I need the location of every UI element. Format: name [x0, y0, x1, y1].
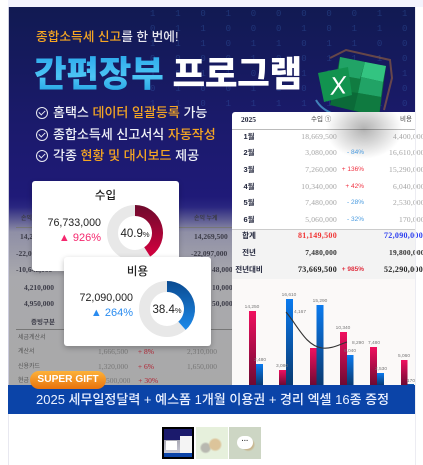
more bubble — [237, 436, 253, 449]
bar chart — [232, 279, 415, 385]
bar chart: 8,290 — [352, 340, 364, 346]
income value: 10,340,000 — [301, 182, 337, 191]
row values: 500,000 + 30% — [106, 376, 158, 385]
prior year label: 전년 — [242, 248, 256, 257]
month label: 1월 — [243, 132, 255, 141]
thumbnail 2 — [196, 427, 228, 459]
bar chart: 10,340 — [336, 325, 351, 331]
bar chart: 14,250 — [245, 304, 260, 310]
column heading: 손익 — [21, 216, 32, 222]
change: ▲ 926% — [59, 232, 101, 244]
row values: 2,310,000 — [187, 347, 217, 356]
bar chart: 2,480 — [254, 357, 266, 363]
values: -22,0 — [16, 249, 32, 258]
values: 14,2 — [20, 232, 33, 241]
month label: 3월 — [243, 165, 255, 174]
income value: 7,480,000 — [305, 198, 337, 207]
comparison expense: 52,290,000 — [384, 265, 423, 274]
panel: income card — [32, 181, 179, 271]
feature 1: 홈택스 데이터 일괄등록 가능 — [53, 105, 207, 120]
left page border — [8, 414, 9, 465]
super gift badge: SUPER GIFT — [37, 374, 99, 385]
row values: 1,666,500 + 8% — [98, 347, 154, 356]
row label: 증빙구분 — [31, 319, 55, 326]
panel: bottom gift band — [8, 385, 415, 414]
comparison change: + 985% — [342, 266, 364, 273]
values: 4,210,000 — [24, 283, 54, 292]
row label: 신용카드 — [18, 364, 40, 370]
more bubble: ··· — [242, 438, 248, 445]
month label: 6월 — [243, 215, 255, 224]
change: + 42% — [345, 183, 364, 190]
prior year income: 7,480,000 — [305, 248, 337, 257]
values: 14,269,500 — [194, 232, 228, 241]
icon: excel logo: X — [327, 71, 349, 101]
income value: 5,060,000 — [305, 215, 337, 224]
icon: excel logo — [315, 49, 393, 112]
check icon 3 — [36, 150, 48, 162]
donut chart: income: 40.9% — [120, 228, 150, 240]
top strip — [8, 0, 423, 7]
super gift badge — [30, 371, 106, 389]
values: -22,097,000 — [191, 249, 227, 258]
panel: left background table — [16, 214, 232, 385]
subtitle: 종합소득세 신고를 한 번에! — [36, 30, 178, 44]
summary rows background — [232, 229, 415, 280]
thumbnail 1: selected — [162, 427, 194, 459]
bar chart: 4,167 — [294, 309, 306, 315]
change: - 32% — [347, 216, 364, 223]
income value: 3,080,000 — [305, 148, 337, 157]
feature 3: 각종 현황 및 대시보드 제공 — [53, 148, 199, 163]
change: - 28% — [347, 199, 364, 206]
column heading right: 손익 누계 — [194, 216, 218, 222]
table rule — [16, 227, 232, 228]
month label: 2월 — [243, 148, 255, 157]
row label: 계산서 — [18, 349, 35, 355]
header: expense: 비용 — [400, 116, 412, 123]
feature list — [36, 105, 216, 163]
comparison label: 전년대비 — [235, 265, 263, 274]
values: -10,648,000 — [16, 265, 52, 274]
check icon 1 — [36, 107, 48, 119]
header: income: 수입 ① — [311, 116, 331, 123]
total label: 합계 — [242, 231, 256, 240]
header: year: 2025 — [241, 115, 256, 124]
bar chart: 16,610 — [282, 292, 297, 298]
bar chart: 3,080 — [276, 363, 288, 369]
feature 2: 종합소득세 신고서식 자동작성 — [53, 127, 216, 142]
amount: 72,090,000 — [80, 292, 133, 304]
row label: 세금계산서 — [18, 335, 46, 341]
donut chart: expense: 38.4% — [152, 304, 182, 316]
change: - 84% — [347, 149, 364, 156]
row values: 1,320,000 + 6% — [98, 362, 154, 371]
total expense: 72,090,000 — [384, 231, 423, 240]
bar chart: 2,530 — [375, 366, 387, 372]
table rule — [16, 329, 232, 330]
check icon 2 — [36, 129, 48, 141]
row values: 1,650,000 — [187, 362, 217, 371]
mini table — [180, 436, 192, 453]
bar chart: 170 — [407, 378, 415, 384]
right page border — [415, 7, 416, 465]
excel shadow — [324, 98, 404, 160]
card title: 비용 — [127, 266, 148, 278]
month label: 5월 — [243, 198, 255, 207]
donut chart: income — [107, 205, 163, 257]
panel: banner background — [8, 7, 416, 385]
income value: 7,260,000 — [305, 165, 337, 174]
comparison income: 73,669,500 — [298, 265, 337, 274]
bar chart: 5,060 — [398, 353, 410, 359]
bar chart: 7,480 — [368, 340, 380, 346]
change: + 136% — [342, 166, 364, 173]
income value: 18,669,500 — [301, 132, 337, 141]
mini card — [166, 441, 177, 450]
header row — [232, 112, 415, 130]
values: 4,950,000 — [24, 299, 54, 308]
panel: expense card — [64, 257, 211, 346]
donut chart: expense — [139, 281, 195, 337]
panel: monthly table — [232, 112, 415, 279]
thumbnail 3 with more overlay — [229, 427, 261, 459]
total income: 81,149,500 — [298, 231, 337, 240]
card title: 수입 — [95, 190, 116, 202]
month label: 4월 — [243, 182, 255, 191]
change: ▲ 264% — [91, 307, 133, 319]
title: 간편장부 프로그램 — [34, 46, 302, 97]
bar chart: 15,290 — [313, 298, 328, 304]
row label: 현금 — [18, 378, 29, 384]
bar chart: 6,040 — [344, 348, 356, 354]
amount: 76,733,000 — [48, 217, 101, 229]
gift text: 2025 세무일정달력 + 예스폼 1개월 이용권 + 경리 엑셀 16종 증정 — [36, 392, 389, 407]
